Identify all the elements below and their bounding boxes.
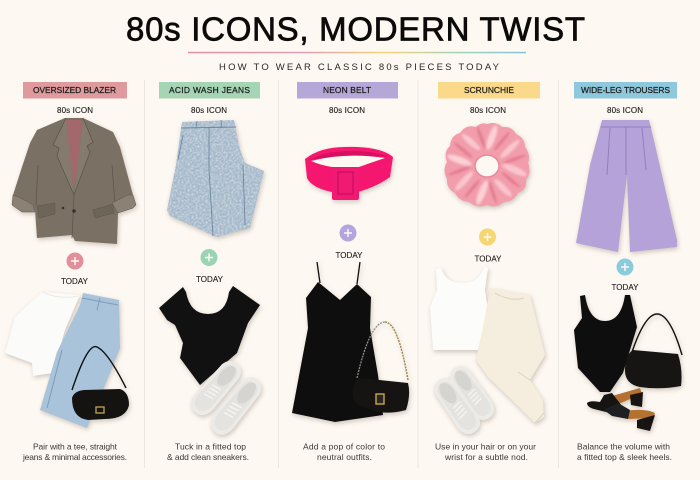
80s icon label: 80s ICON xyxy=(57,106,93,115)
panel: wide-leg trousers xyxy=(574,82,682,462)
heading: NEON BELT xyxy=(323,85,371,95)
rainbow rule xyxy=(188,52,526,53)
plus badge xyxy=(340,224,356,242)
caption: Add a pop of color to xyxy=(303,442,385,452)
heading xyxy=(438,82,540,98)
heading: SCRUNCHIE xyxy=(464,85,514,95)
caption: neutral outfits. xyxy=(317,452,372,462)
title: 80s ICONS, MODERN TWIST xyxy=(126,10,585,48)
caption: wrist for a subtle nod. xyxy=(444,452,528,462)
80s icon label: 80s ICON xyxy=(607,106,643,115)
outfit: tee, jeans, bag xyxy=(5,292,129,428)
item: neon belt xyxy=(305,147,393,200)
subtitle: HOW TO WEAR CLASSIC 80s PIECES TODAY xyxy=(219,62,500,73)
caption: Pair with a tee, straight xyxy=(33,442,118,452)
panel: acid wash jeans xyxy=(159,82,266,462)
item: acid wash jeans xyxy=(167,120,264,237)
caption: Use in your hair or on your xyxy=(435,442,536,452)
today label: TODAY xyxy=(196,275,224,284)
caption: jeans & minimal accessories. xyxy=(22,452,127,462)
today label: TODAY xyxy=(61,277,89,286)
80s icon label: 80s ICON xyxy=(329,106,365,115)
panel: oversized blazer xyxy=(5,82,136,462)
outfit: tank, joggers, sneakers xyxy=(429,266,545,439)
80s icon label: 80s ICON xyxy=(191,106,227,115)
heading xyxy=(574,82,677,98)
outfit: bodysuit, sneakers xyxy=(159,286,266,440)
panel: scrunchie xyxy=(429,82,545,462)
caption: Balance the volume with xyxy=(577,442,670,452)
heading xyxy=(159,82,260,98)
caption: & add clean sneakers. xyxy=(167,452,249,462)
plus badge xyxy=(66,252,84,270)
item: wide-leg trousers xyxy=(576,120,677,252)
plus badge xyxy=(616,258,634,276)
80s icon label: 80s ICON xyxy=(470,106,506,115)
outfit: bodysuit, bag, heels xyxy=(574,295,682,431)
heading: OVERSIZED BLAZER xyxy=(33,85,116,95)
item: blazer xyxy=(12,118,136,244)
today label: TODAY xyxy=(474,254,502,264)
panel: neon belt xyxy=(292,82,409,462)
heading: WIDE-LEG TROUSERS xyxy=(581,85,670,95)
heading: ACID WASH JEANS xyxy=(169,85,250,95)
today label: TODAY xyxy=(612,283,639,292)
caption: Tuck in a fitted top xyxy=(175,442,246,452)
plus badge xyxy=(479,228,496,246)
heading xyxy=(297,82,398,98)
outfit: slip dress, chain bag xyxy=(292,262,409,422)
caption: a fitted top & sleek heels. xyxy=(577,452,672,462)
plus badge xyxy=(200,249,218,266)
item: scrunchie xyxy=(444,123,530,206)
heading xyxy=(23,82,127,98)
today label: TODAY xyxy=(336,251,363,260)
